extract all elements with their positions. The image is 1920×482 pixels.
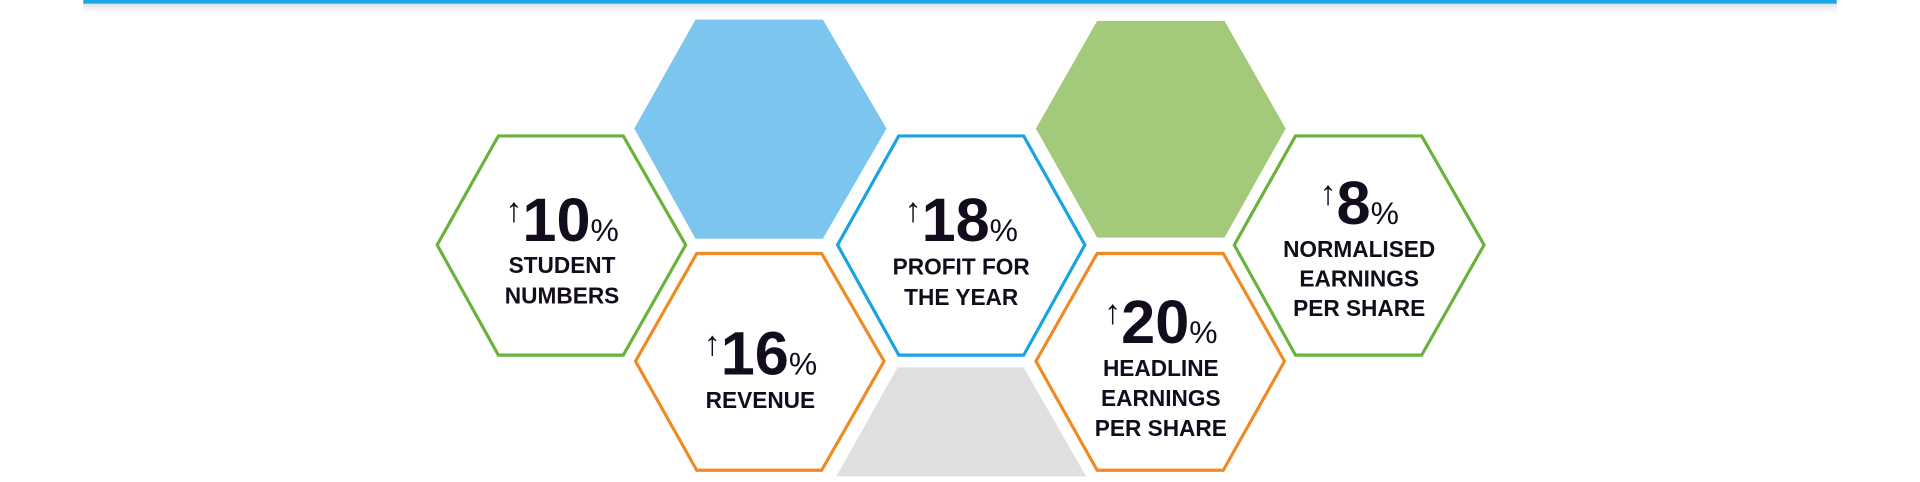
stat: 18%: % (990, 212, 1018, 248)
panel: revenue (636, 253, 884, 470)
stat: 8%: 8 (1337, 169, 1371, 237)
label: headline EPS: PER SHARE (1095, 415, 1227, 441)
label: student numbers: NUMBERS (505, 283, 619, 309)
label: profit: THE YEAR (904, 284, 1018, 310)
stat: 10%: % (591, 212, 619, 248)
label: headline EPS: EARNINGS (1101, 385, 1221, 411)
stat: 20%: 20 (1121, 288, 1189, 356)
stat: 18%: 18 (922, 186, 990, 254)
panel: headline EPS (1036, 253, 1284, 470)
stat: 16%: 16 (721, 320, 789, 388)
stat: 10%: 10 (522, 186, 591, 254)
label: student numbers: STUDENT (509, 252, 615, 278)
hex: grey partial (836, 367, 1086, 476)
stat: 8%: ↑ (1319, 175, 1337, 213)
stat: 16%: % (789, 346, 817, 382)
top rule (83, 0, 1837, 13)
label: normalised EPS: NORMALISED (1283, 236, 1435, 262)
label: revenue: REVENUE (706, 387, 815, 413)
hex: green filled (1036, 21, 1286, 238)
stat: 18%: ↑ (904, 192, 922, 230)
label: headline EPS: HEADLINE (1103, 355, 1219, 381)
stat: 20%: % (1189, 314, 1218, 350)
stat: 8%: % (1371, 195, 1399, 231)
label: profit: PROFIT FOR (893, 253, 1030, 279)
panel: student numbers (437, 136, 686, 355)
panel: profit for the year (838, 136, 1085, 355)
stat: 16%: ↑ (704, 325, 721, 363)
hex: blue filled (634, 20, 887, 239)
stat: 10%: ↑ (505, 192, 522, 230)
panel: normalised EPS (1234, 136, 1484, 355)
stat: 20%: ↑ (1104, 293, 1121, 331)
label: normalised EPS: PER SHARE (1293, 295, 1425, 321)
label: normalised EPS: EARNINGS (1299, 266, 1419, 292)
